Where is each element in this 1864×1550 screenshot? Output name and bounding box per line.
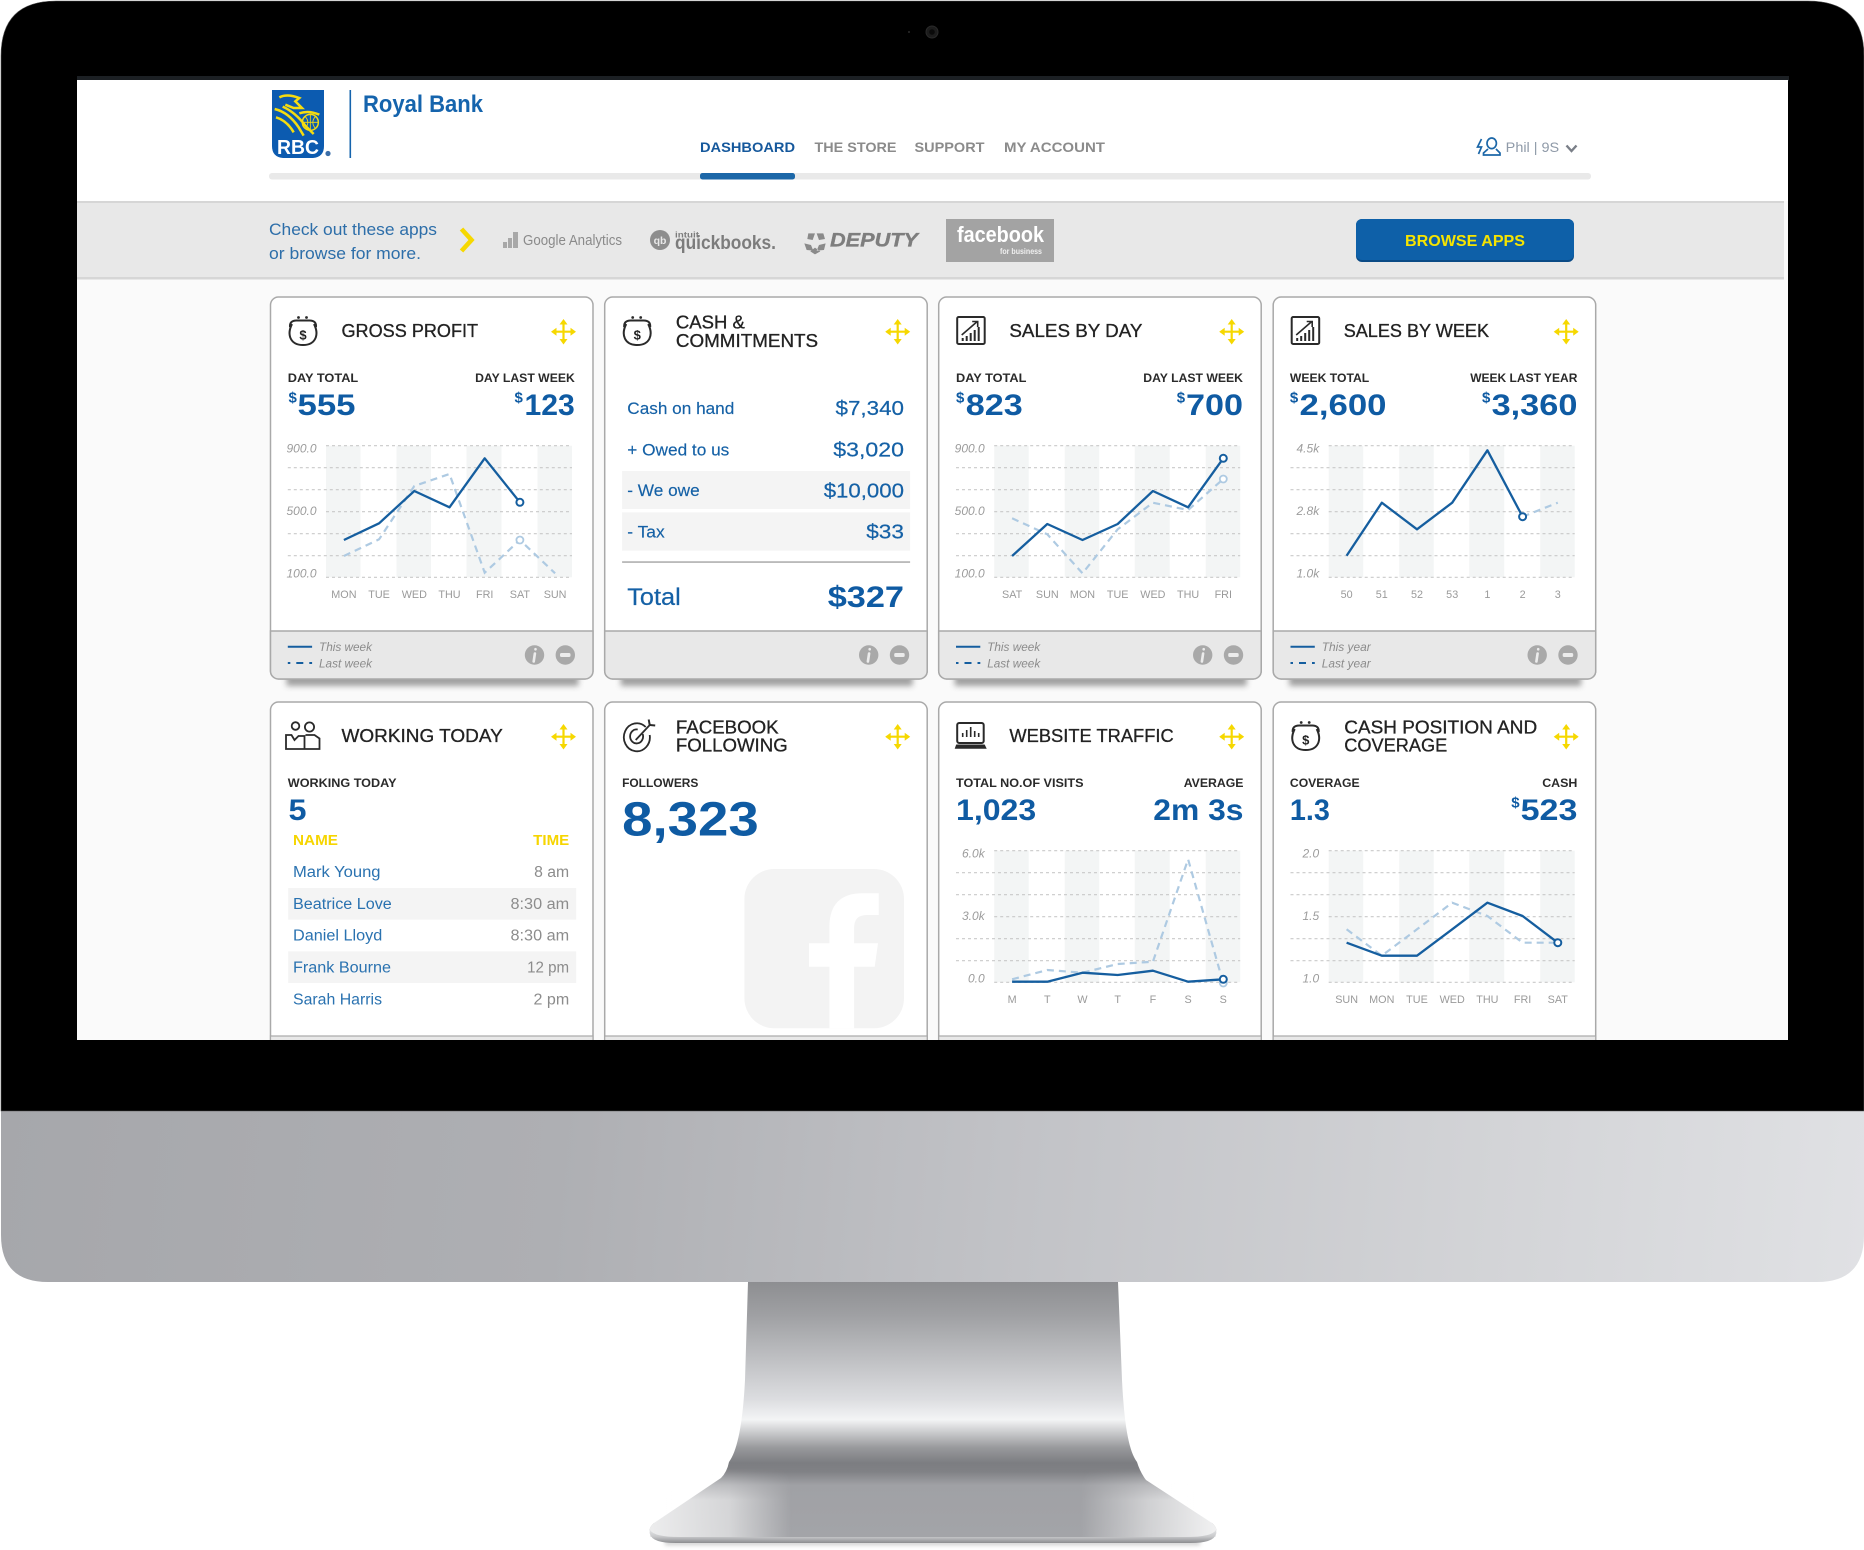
buttons: info and remove <box>525 645 575 665</box>
heading: WORKING TODAY <box>342 725 503 746</box>
QuickBooks: intuit <box>675 231 699 240</box>
buttons: info and remove <box>859 645 909 665</box>
line chart: FRI <box>1514 994 1531 1006</box>
card: gross profit <box>270 297 593 686</box>
line chart: S <box>1184 994 1192 1006</box>
line chart: 500.0 <box>955 504 985 518</box>
iMac stand <box>650 1282 1216 1545</box>
line chart: 50 <box>1341 589 1353 601</box>
row: owed to us: + Owed to us <box>627 442 729 460</box>
heading: COMMITMENTS <box>676 330 818 351</box>
table header <box>293 833 570 849</box>
legend: Last week <box>319 657 373 671</box>
line chart: 100.0 <box>286 566 317 580</box>
stat: average: 2m 3s <box>1153 794 1244 827</box>
row: cash on hand: Cash on hand <box>627 400 734 418</box>
line chart: T <box>1044 994 1051 1006</box>
line chart: 500.0 <box>286 504 317 518</box>
line chart: MON <box>1070 589 1095 601</box>
QuickBooks: quickbooks. <box>675 233 776 254</box>
card: sales by week <box>1273 297 1596 686</box>
line chart: 100.0 <box>955 566 985 580</box>
Facebook for business: for business <box>1000 247 1042 256</box>
legend: This year <box>1322 640 1372 654</box>
row: owed to us: $3,020 <box>833 439 904 461</box>
stat: cash: $ <box>1511 795 1520 812</box>
line chart: SAT <box>1002 589 1023 601</box>
stat: total visits: TOTAL NO.OF VISITS <box>956 776 1083 790</box>
heading: CASH & <box>676 312 746 333</box>
stat: total visits <box>956 776 1084 827</box>
card: cash and commitments <box>605 297 927 686</box>
line chart: 6.0k <box>962 846 986 860</box>
line chart <box>1290 441 1575 601</box>
nav track <box>269 173 1591 180</box>
heading <box>676 315 818 348</box>
monitor bezel <box>1 1 1864 1111</box>
line chart: 1 <box>1484 589 1490 601</box>
line chart: T <box>1114 994 1121 1006</box>
icon: purse <box>290 316 316 345</box>
legend: Last week <box>987 657 1041 671</box>
icon: yellow chevron <box>462 229 472 251</box>
row: tax <box>622 512 910 551</box>
row: tax: $33 <box>866 521 904 543</box>
line chart: 1.5 <box>1303 909 1320 923</box>
stat: day total: $ <box>288 390 298 407</box>
line chart: 1.0k <box>1297 566 1320 580</box>
navigation: SUPPORT <box>914 139 985 155</box>
heading: FACEBOOK <box>676 716 779 737</box>
nav active marker <box>700 173 795 180</box>
icon: team <box>286 722 320 749</box>
icon: laptop <box>955 723 987 749</box>
table row: Frank Bourne: 12 pm <box>527 959 569 976</box>
stand neck and foot <box>650 1282 1216 1537</box>
stat: day total: DAY TOTAL <box>288 371 358 385</box>
table row: Daniel Lloyd: Daniel Lloyd <box>293 928 382 945</box>
table row: Frank Bourne <box>288 951 576 983</box>
table row: Daniel Lloyd: 8:30 am <box>510 928 569 945</box>
icon: move <box>1219 724 1244 750</box>
stat: day last week: DAY LAST WEEK <box>1143 371 1243 385</box>
button: browse apps <box>1356 219 1574 262</box>
line chart: THU <box>1476 994 1499 1006</box>
stat: day total: 555 <box>298 389 356 422</box>
navigation: MY ACCOUNT <box>1004 139 1105 155</box>
stat: cash: CASH <box>1542 776 1577 790</box>
heading: WEBSITE TRAFFIC <box>1009 725 1174 746</box>
line chart: THU <box>438 589 461 601</box>
table row: Beatrice Love <box>288 888 576 920</box>
button: browse apps: BROWSE APPS <box>1405 233 1525 250</box>
stat: coverage: COVERAGE <box>1290 776 1360 790</box>
icon: move <box>885 724 910 750</box>
label: followers: FOLLOWERS <box>622 776 698 790</box>
line chart: 2.8k <box>1296 504 1320 518</box>
stat: total visits: 1,023 <box>956 794 1036 827</box>
line chart: S <box>1220 994 1227 1006</box>
line chart: 53 <box>1446 589 1458 601</box>
icon: facebook watermark <box>744 869 904 1028</box>
table header: NAME <box>293 833 338 849</box>
row: total: $327 <box>828 581 904 614</box>
icon: target <box>624 720 655 751</box>
legend <box>1290 640 1372 671</box>
line chart: TUE <box>1107 589 1129 601</box>
Google Analytics: Google Analytics <box>523 233 622 249</box>
row: cash on hand <box>628 400 904 418</box>
line chart <box>1290 846 1575 1006</box>
heading <box>1344 716 1537 756</box>
line chart: 1.0 <box>1303 971 1320 985</box>
stat: day last week: $ <box>1177 390 1186 407</box>
monitor chin <box>1 1111 1864 1282</box>
header <box>269 90 1591 180</box>
row: tax: - Tax <box>627 524 665 542</box>
line chart: 51 <box>1376 589 1388 601</box>
icon: sales chart <box>957 317 985 344</box>
line chart: 3 <box>1555 589 1561 601</box>
stat: week total <box>1290 371 1386 422</box>
stat: day last week: 700 <box>1186 389 1243 422</box>
icon: chevron down <box>1566 146 1576 151</box>
apps band <box>77 201 1784 280</box>
row: we owe: $10,000 <box>824 480 904 502</box>
legend: This week <box>987 640 1041 654</box>
user name: Phil | 9S <box>1506 139 1559 155</box>
row: owed to us <box>628 441 904 460</box>
camera <box>908 26 938 38</box>
foot bottom plate <box>650 1530 1216 1543</box>
table row: Beatrice Love: 8:30 am <box>510 896 569 913</box>
stat: working today: 5 <box>288 794 306 827</box>
table row: Mark Young: Mark Young <box>293 864 381 881</box>
logo: RBC shield: RBC <box>277 136 319 159</box>
navigation <box>700 142 1105 152</box>
line chart: F <box>1150 994 1157 1006</box>
heading: CASH POSITION AND <box>1344 716 1537 737</box>
apps band: or browse for more. <box>269 244 421 263</box>
table row: Sarah Harris: 2 pm <box>534 991 569 1008</box>
stat: day total: $ <box>956 390 965 407</box>
stat: week last year: 3,360 <box>1492 389 1577 422</box>
icon: user <box>1478 138 1500 155</box>
line chart: WED <box>1440 994 1465 1006</box>
line chart: 900.0 <box>286 441 317 455</box>
screen <box>77 80 1788 1042</box>
icon: purse: $ <box>634 328 642 342</box>
line chart <box>286 441 572 601</box>
stat: week last year: $ <box>1482 390 1491 407</box>
icon: purse: $ <box>1302 732 1310 748</box>
table row: Beatrice Love: Beatrice Love <box>293 896 392 913</box>
heading: COVERAGE <box>1344 735 1447 756</box>
line chart: FRI <box>476 589 493 601</box>
brand name: Royal Bank <box>363 91 484 118</box>
Deputy <box>804 231 921 254</box>
line chart: M <box>1008 994 1017 1006</box>
icon: move <box>1554 319 1579 344</box>
stat: working today: WORKING TODAY <box>288 776 396 790</box>
row: we owe: - We owe <box>627 482 700 500</box>
table row: Frank Bourne: Frank Bourne <box>293 959 391 976</box>
line chart: TUE <box>1406 994 1428 1006</box>
big number: 8,323 <box>622 794 759 847</box>
navigation: THE STORE <box>814 139 896 155</box>
card: cash position and coverage <box>1273 702 1596 1042</box>
logo divider <box>350 90 351 158</box>
line chart: 4.5k <box>1297 441 1320 455</box>
stat: week total: 2,600 <box>1299 389 1386 422</box>
table row: Sarah Harris: Sarah Harris <box>293 991 382 1008</box>
icon: purse <box>624 316 651 345</box>
stat: coverage <box>1290 776 1360 827</box>
icon: move <box>551 319 576 344</box>
buttons: info and remove <box>1193 645 1243 665</box>
table header: TIME <box>533 833 570 849</box>
buttons: info and remove <box>1528 645 1578 665</box>
foot side highlights <box>650 1468 1216 1537</box>
line chart <box>955 441 1240 601</box>
stat: week last year <box>1470 371 1578 422</box>
table row: Mark Young: 8 am <box>534 864 569 881</box>
logo: RBC shield <box>272 90 331 159</box>
line chart: WED <box>402 589 427 601</box>
stat: coverage: 1.3 <box>1290 794 1330 827</box>
row: cash on hand: $7,340 <box>836 398 904 420</box>
stat: day last week: 123 <box>524 389 575 422</box>
heading: SALES BY WEEK <box>1344 320 1490 341</box>
heading: GROSS PROFIT <box>342 320 478 341</box>
icon: purse <box>1292 721 1319 750</box>
row: total <box>628 584 902 609</box>
QuickBooks <box>650 230 776 254</box>
navigation: DASHBOARD <box>700 139 795 155</box>
stat: working today <box>288 776 396 827</box>
stat: day total <box>956 371 1026 422</box>
icon: move <box>885 319 910 344</box>
line chart: 0.0 <box>968 971 985 985</box>
heading: SALES BY DAY <box>1009 320 1142 341</box>
stat: day last week: $ <box>514 390 524 407</box>
icon: move <box>551 724 576 750</box>
row: we owe <box>622 471 910 509</box>
table row: Mark Young <box>293 864 569 881</box>
stat: week last year: WEEK LAST YEAR <box>1470 371 1578 385</box>
line chart: FRI <box>1215 589 1232 601</box>
line chart: 900.0 <box>955 441 985 455</box>
stat: average <box>1153 776 1244 827</box>
line chart: W <box>1077 994 1088 1006</box>
Facebook for business <box>946 219 1054 262</box>
icon: move <box>1554 724 1579 750</box>
legend <box>288 642 372 668</box>
icon: sales chart <box>1292 317 1319 344</box>
line chart: SUN <box>1036 589 1059 601</box>
line chart: SAT <box>510 589 530 601</box>
line chart: SAT <box>1548 994 1568 1006</box>
table row: Daniel Lloyd <box>293 928 569 945</box>
stand shadow <box>665 1541 1200 1545</box>
card: website traffic <box>939 702 1261 1042</box>
legend: This week <box>319 640 373 654</box>
stat: average: AVERAGE <box>1184 776 1244 790</box>
stat: week total: WEEK TOTAL <box>1290 371 1369 385</box>
icon: purse: $ <box>299 328 307 342</box>
line chart: TUE <box>368 589 390 601</box>
line chart: 52 <box>1411 589 1423 601</box>
line chart: SUN <box>1335 994 1358 1006</box>
legend <box>956 640 1041 671</box>
stat: week total: $ <box>1290 390 1299 407</box>
heading: FOLLOWING <box>676 735 788 756</box>
line chart: 2.0 <box>1302 846 1320 860</box>
Deputy: DEPUTY <box>830 231 921 252</box>
Facebook for business: facebook <box>957 222 1045 247</box>
line chart: SUN <box>544 589 566 601</box>
icon: move <box>1219 319 1244 344</box>
line chart <box>956 846 1240 1006</box>
line chart: MON <box>331 589 357 601</box>
stat: day last week <box>476 374 575 416</box>
stat: day total: 823 <box>966 389 1023 422</box>
line chart: MON <box>1369 994 1394 1006</box>
table row: Sarah Harris <box>293 991 569 1008</box>
line chart: WED <box>1140 589 1166 601</box>
line chart: 2 <box>1520 589 1526 601</box>
heading <box>676 716 788 756</box>
stat: day total <box>288 374 358 416</box>
card: working today <box>270 702 593 1042</box>
stat: cash: 523 <box>1521 794 1577 827</box>
line chart: THU <box>1177 589 1199 601</box>
screen top edge <box>77 76 1789 81</box>
line chart: 3.0k <box>962 909 986 923</box>
card: sales by day <box>939 297 1261 686</box>
legend: Last year <box>1322 657 1372 671</box>
stat: day total: DAY TOTAL <box>956 371 1026 385</box>
QuickBooks: qb <box>654 235 666 247</box>
stat: day last week: DAY LAST WEEK <box>475 371 575 385</box>
band text: Check out these apps <box>269 220 437 239</box>
stat: day last week <box>1143 371 1243 422</box>
row: total: Total <box>627 584 681 611</box>
card: facebook following <box>605 702 927 1042</box>
stat: cash <box>1511 776 1577 827</box>
